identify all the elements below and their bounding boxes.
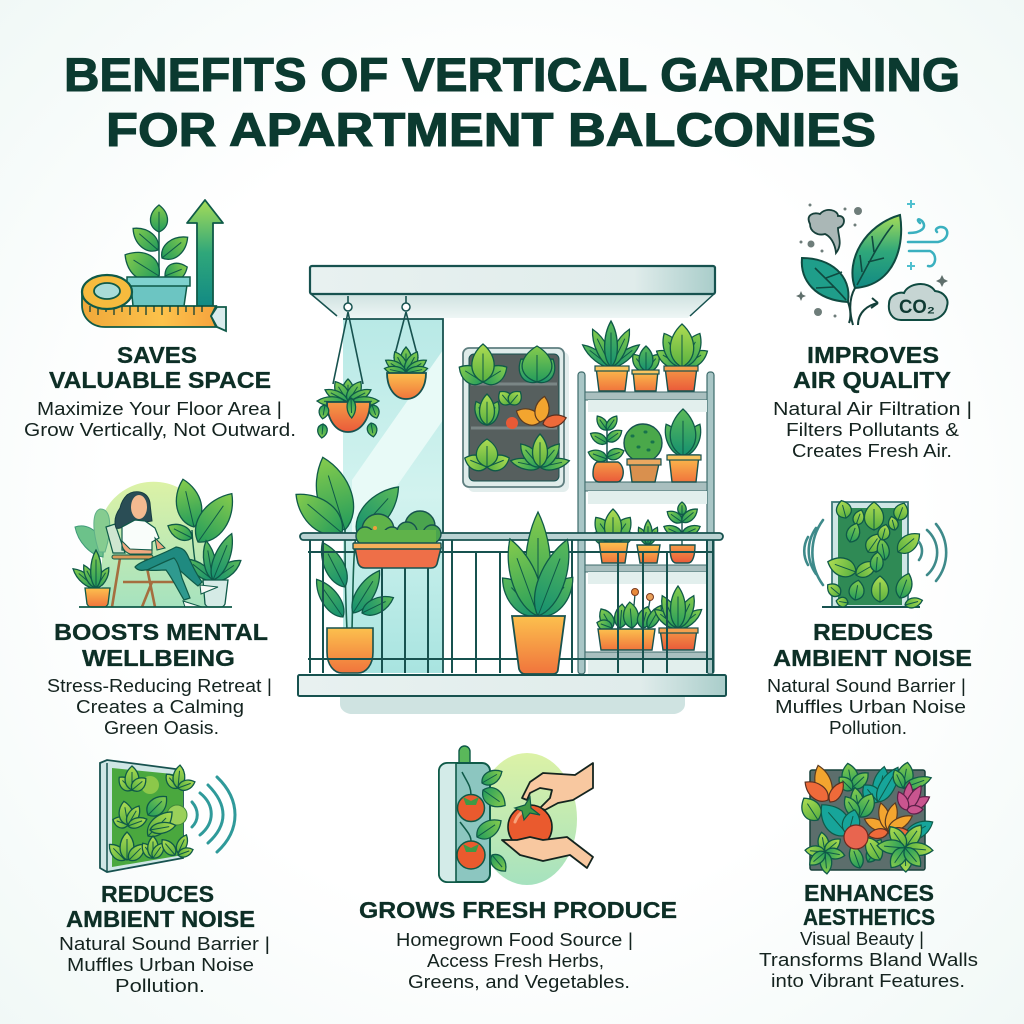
panel: boosts mental wellbeing	[47, 477, 272, 738]
heading: AESTHETICS	[803, 904, 935, 930]
panel: reduces ambient noise right	[767, 499, 972, 738]
heading: WELLBEING	[82, 645, 235, 671]
heading	[49, 342, 271, 393]
description	[59, 934, 270, 996]
flower	[844, 825, 868, 849]
description: Natural Air Filtration |	[773, 399, 972, 419]
central balcony illustration	[287, 266, 726, 714]
description	[759, 929, 978, 991]
description	[24, 399, 296, 440]
shelf plants row 4	[595, 586, 705, 650]
shelf plants row 1	[580, 321, 711, 391]
heading: GROWS FRESH PRODUCE	[359, 897, 677, 923]
heading: AMBIENT NOISE	[66, 906, 255, 932]
heading: BOOSTS MENTAL	[54, 619, 268, 645]
panel: grows fresh produce	[359, 746, 677, 992]
icon: leaves cleaning air	[796, 200, 948, 325]
description: Creates a Calming	[76, 697, 244, 717]
icon: vertical plant wall with sound waves	[804, 499, 946, 610]
panel: improves air quality	[773, 200, 972, 461]
title: FOR APARTMENT BALCONIES	[106, 103, 876, 156]
heading: REDUCES	[813, 619, 933, 645]
heading: REDUCES	[101, 881, 214, 907]
icon: tomato harvest from tower	[439, 746, 593, 885]
icon: person relaxing among plants	[70, 477, 245, 607]
description: Muffles Urban Noise	[775, 697, 966, 717]
description: Visual Beauty |	[800, 929, 924, 949]
description: Muffles Urban Noise	[67, 955, 254, 975]
description: into Vibrant Features.	[771, 971, 965, 991]
description: Greens, and Vegetables.	[408, 972, 630, 992]
hanging planter left	[317, 296, 381, 438]
planter box on railing	[353, 511, 441, 568]
panel plants	[455, 344, 570, 474]
description: Pollution.	[115, 976, 205, 996]
balcony floor slab	[298, 675, 726, 714]
vertical garden wall panel	[455, 344, 570, 492]
description: Homegrown Food Source |	[396, 930, 633, 950]
heading	[793, 342, 951, 393]
icon: leaves cleaning air: CO₂	[899, 297, 935, 318]
description: Pollution.	[829, 718, 907, 738]
title: BENEFITS OF VERTICAL GARDENING	[64, 48, 960, 101]
floor plant centre	[494, 512, 582, 674]
icon: green wall panel with sound waves	[100, 760, 235, 872]
description	[767, 676, 966, 738]
description: Transforms Bland Walls	[759, 950, 978, 970]
icon: measuring tape, pot and arrow	[82, 200, 226, 331]
heading: VALUABLE SPACE	[49, 367, 271, 393]
heading: SAVES	[117, 342, 197, 368]
panel: enhances aesthetics	[759, 761, 978, 991]
shelf plants row 2	[586, 409, 706, 482]
heading: AMBIENT NOISE	[773, 645, 972, 671]
panel: saves valuable space	[24, 200, 296, 440]
panel: reduces ambient noise left	[59, 760, 270, 996]
glass door	[343, 319, 443, 673]
description: Creates Fresh Air.	[792, 441, 952, 461]
description: Maximize Your Floor Area |	[37, 399, 282, 419]
description: Access Fresh Herbs,	[427, 951, 604, 971]
description: Green Oasis.	[104, 718, 219, 738]
railing	[300, 533, 723, 673]
heading: AIR QUALITY	[793, 367, 951, 393]
heading: ENHANCES	[804, 880, 934, 906]
hanging planter right	[383, 296, 429, 399]
description	[773, 399, 972, 461]
description: Stress-Reducing Retreat |	[47, 676, 272, 696]
heading	[54, 619, 268, 671]
title	[64, 48, 960, 156]
balcony roof slab	[310, 266, 715, 318]
heading: IMPROVES	[807, 342, 939, 368]
description: Grow Vertically, Not Outward.	[24, 420, 296, 440]
heading	[773, 619, 972, 671]
heading	[66, 881, 255, 932]
shelf unit	[578, 372, 714, 674]
description: Filters Pollutants &	[786, 420, 959, 440]
description: Natural Sound Barrier |	[59, 934, 270, 954]
heading	[803, 880, 935, 930]
icon: colourful leaf wall	[796, 761, 936, 874]
large floor plant left	[287, 452, 408, 673]
shelf plants row 3	[589, 502, 702, 563]
description	[396, 930, 633, 992]
description: Natural Sound Barrier |	[767, 676, 966, 696]
description	[47, 676, 272, 738]
